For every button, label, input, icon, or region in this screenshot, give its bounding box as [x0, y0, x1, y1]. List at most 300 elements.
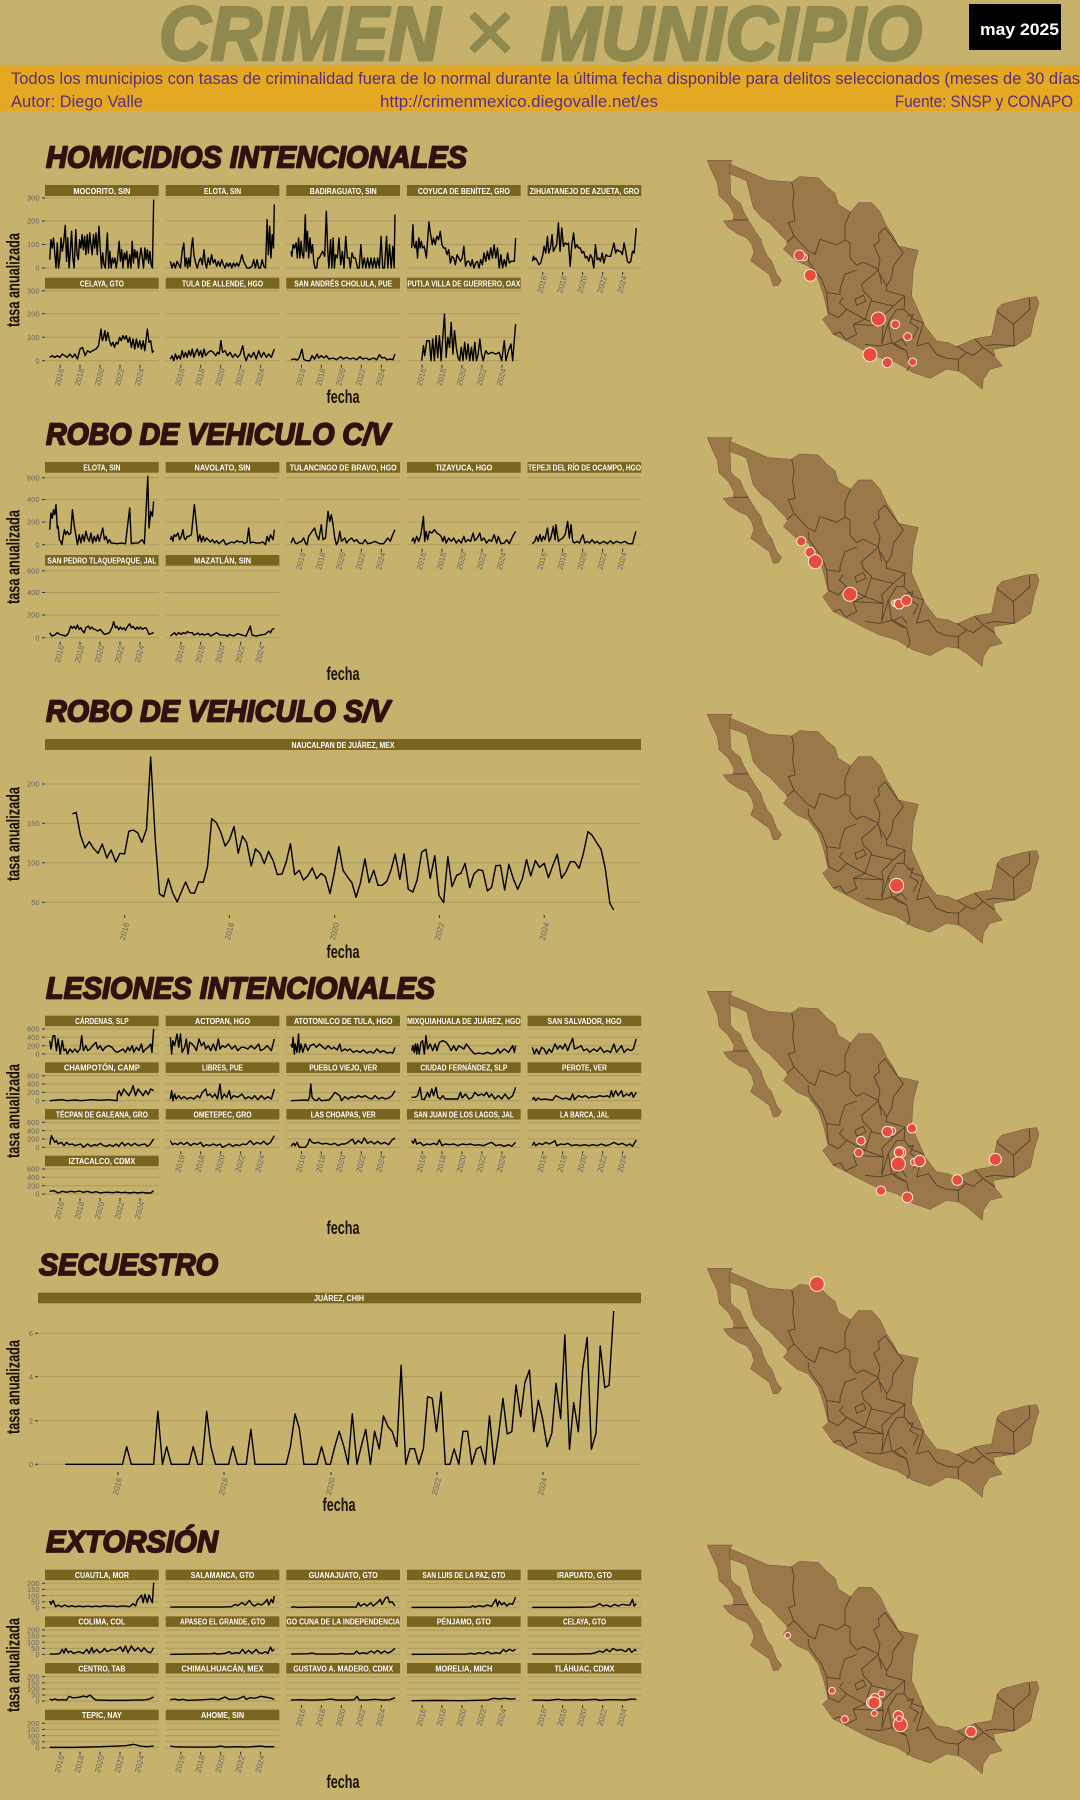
small multiple: Badiraguato: BADIRAGUATO, SIN — [310, 187, 377, 196]
small multiple: Técpan de Galeana: TÉCPAN DE GALEANA, GRO — [56, 1110, 148, 1119]
small multiple: Elota: ELOTA, SIN — [204, 187, 241, 196]
x axis labels: 2020 — [576, 274, 589, 294]
x axis labels: 2022 — [430, 1476, 443, 1496]
y axis labels: 0 — [35, 1096, 40, 1105]
x axis labels: 2024 — [254, 367, 267, 387]
x axis labels: 2024 — [133, 644, 146, 664]
x axis labels: 2022 — [596, 551, 609, 571]
small multiple: Pénjamo — [407, 1616, 521, 1654]
x axis title: fecha — [326, 387, 360, 407]
y axis title: tasa anualizada — [4, 786, 24, 881]
x axis labels: 2022 — [433, 921, 446, 941]
x axis labels: 2018 — [556, 1707, 569, 1727]
x axis labels: 2018 — [73, 1754, 86, 1774]
x axis labels: 2022 — [596, 1153, 609, 1173]
y axis labels: 100 — [27, 333, 40, 342]
small multiple: Colima — [45, 1616, 159, 1654]
x axis title: fecha — [326, 664, 360, 684]
y axis labels — [27, 473, 45, 642]
subtitle band: http://crimenmexico.diegovalle.net/es — [380, 93, 658, 111]
small multiple: Irapuato: IRAPUATO, GTO — [557, 1571, 612, 1580]
small multiple: Zihuatanejo de Azueta — [528, 185, 641, 268]
small multiple: Tláhuac — [528, 1663, 641, 1701]
y axis labels: 0 — [35, 264, 40, 273]
x axis labels: 2016 — [118, 921, 131, 941]
small multiple: Pueblo Viejo: PUEBLO VIEJO, VER — [309, 1064, 377, 1073]
y axis labels: 150 — [27, 819, 40, 828]
y axis labels: 50 — [31, 1737, 40, 1746]
y axis labels: 50 — [31, 1691, 40, 1700]
x axis labels: 2020 — [324, 1476, 337, 1496]
x axis labels: 2018 — [194, 367, 207, 387]
x axis labels: 2024 — [133, 1754, 146, 1774]
x axis labels: 2016 — [536, 551, 549, 571]
x axis labels: 2024 — [374, 551, 388, 571]
small multiple: Celaya — [528, 1616, 641, 1654]
x axis labels: 2020 — [334, 551, 348, 571]
x axis labels: 2018 — [217, 1476, 230, 1496]
y axis title: tasa anualizada — [4, 1617, 24, 1712]
x axis labels: 2020 — [93, 367, 106, 387]
y axis labels: 0 — [35, 540, 40, 549]
small multiple: Centro — [45, 1663, 159, 1701]
small multiple: Tizayuca: TIZAYUCA, HGO — [435, 464, 492, 473]
x axis labels — [53, 1151, 629, 1220]
small multiple: Chimalhuacán: CHIMALHUACÁN, MEX — [182, 1664, 264, 1673]
panel: robo de vehiculo s/v — [4, 694, 641, 962]
small multiple: Tepic: TEPIC, NAY — [82, 1711, 122, 1720]
x axis labels: 2016 — [415, 551, 428, 571]
small multiple: San Luis de la Paz: SAN LUIS DE LA PAZ, GTO — [422, 1571, 505, 1580]
y axis labels: 150 — [27, 1585, 40, 1594]
small multiple: La Barca — [528, 1109, 641, 1147]
x axis labels: 2018 — [194, 1153, 207, 1173]
x axis labels: 2022 — [354, 367, 368, 387]
small multiple: Putla Villa de Guerrero: PUTLA VILLA DE GUERRERO, OAX — [407, 280, 521, 288]
small multiple: Mocorito — [45, 185, 159, 268]
panel: robo de vehiculo c/v — [4, 416, 641, 684]
x axis labels: 2016 — [415, 367, 428, 387]
small multiple: Tepeji del Río de Ocampo: TEPEJI DEL RÍO DE OCAMPO, HGO — [528, 464, 641, 473]
x axis labels: 2018 — [73, 367, 86, 387]
small multiple: Guanajuato — [286, 1570, 400, 1608]
x axis labels: 2016 — [536, 1153, 549, 1173]
y axis labels: 600 — [27, 1165, 40, 1174]
x axis labels: 2016 — [536, 1707, 549, 1727]
y axis labels: 100 — [27, 858, 40, 867]
x axis labels: 2022 — [234, 1153, 247, 1173]
x axis labels: 2016 — [294, 551, 308, 571]
y axis labels: 200 — [27, 1135, 40, 1144]
x axis labels: 2020 — [214, 367, 227, 387]
small multiple: San Pedro Tlaquepaque — [45, 555, 159, 638]
x axis labels: 2020 — [93, 1754, 106, 1774]
small multiple: Navolato: NAVOLATO, SIN — [195, 464, 251, 473]
small multiple: Ahome — [166, 1710, 279, 1748]
subtitle band: Todos los municipios con tasas de criminalidad fuera de lo normal durante la última fecha disponible para delitos seleccionados (meses de 30 días — [11, 70, 1080, 88]
x axis labels: 2016 — [111, 1476, 124, 1496]
y axis labels: 150 — [27, 1678, 40, 1687]
map: lesiones — [707, 991, 1039, 1220]
small multiple: San Salvador — [528, 1016, 641, 1054]
x axis labels: 2024 — [495, 551, 508, 571]
small multiple: Irapuato — [528, 1570, 641, 1608]
y axis labels: 600 — [27, 566, 40, 575]
x axis title: fecha — [326, 942, 360, 962]
x axis labels: 2022 — [113, 644, 126, 664]
small multiple: Coyuca de Benítez: COYUCA DE BENÍTEZ, GRO — [418, 187, 510, 196]
x axis labels: 2024 — [495, 1153, 508, 1173]
x axis labels: 2016 — [53, 1200, 66, 1220]
x axis labels: 2022 — [113, 367, 126, 387]
panel: secuestro — [4, 1247, 641, 1515]
strip: Juárez: JUÁREZ, CHIH — [314, 1294, 364, 1303]
x axis labels: 2016 — [53, 1754, 66, 1774]
y axis labels — [27, 1025, 45, 1199]
y axis labels: 600 — [27, 1071, 40, 1080]
x axis labels: 2024 — [254, 1153, 267, 1173]
y axis labels: 0 — [35, 356, 40, 365]
x axis labels: 2020 — [214, 1754, 227, 1774]
x axis title: fecha — [326, 1218, 360, 1238]
y axis labels: 400 — [27, 588, 40, 597]
subtitle band: Autor: Diego Valle — [11, 93, 143, 111]
small multiple: Tepic — [45, 1710, 159, 1748]
y axis labels: 100 — [27, 1638, 40, 1647]
subtitle band — [0, 65, 1080, 111]
x axis labels: 2018 — [556, 551, 569, 571]
y axis labels: 0 — [35, 1143, 40, 1152]
x axis labels: 2022 — [596, 1707, 609, 1727]
map: secuestro — [707, 1268, 1039, 1497]
small multiple: Iztacalco: IZTACALCO, CDMX — [69, 1157, 136, 1166]
small multiple: Pénjamo: PÉNJAMO, GTO — [437, 1618, 491, 1627]
small multiple: Champotón: CHAMPOTÓN, CAMP — [64, 1064, 141, 1073]
small multiple: Elota — [166, 185, 279, 268]
date badge: may 2025 — [980, 20, 1059, 39]
x axis labels: 2016 — [174, 1153, 187, 1173]
small multiple: Mixquiahuala de Juárez — [407, 1016, 521, 1054]
small multiple: Colima: COLIMA, COL — [78, 1618, 125, 1627]
x axis labels: 2016 — [294, 1153, 308, 1173]
x axis labels — [53, 272, 629, 387]
small multiple: Gustavo A. Madero — [286, 1663, 400, 1701]
x axis labels — [53, 549, 629, 664]
small multiple: Cuautla — [45, 1570, 159, 1608]
y axis labels: 50 — [31, 1597, 40, 1606]
y axis labels: 200 — [27, 1719, 40, 1728]
x axis title: fecha — [322, 1495, 356, 1515]
x axis labels — [111, 1472, 549, 1496]
y axis labels: 200 — [27, 1181, 40, 1190]
small multiple: San Andrés Cholula — [286, 278, 400, 361]
y axis labels: 200 — [27, 1579, 40, 1588]
small multiple: Ahome: AHOME, SIN — [201, 1711, 244, 1720]
x axis labels: 2016 — [294, 1707, 308, 1727]
y axis labels: 300 — [27, 286, 40, 295]
x axis labels: 2024 — [616, 274, 629, 294]
small multiple: Ometepec — [166, 1109, 279, 1147]
y axis labels: 50 — [31, 1644, 40, 1653]
heading: EXTORSIÓN — [46, 1524, 219, 1559]
y axis labels: 0 — [35, 1190, 40, 1199]
x axis labels: 2016 — [53, 367, 66, 387]
x axis labels: 2020 — [93, 1200, 106, 1220]
x axis labels: 2022 — [475, 367, 488, 387]
small multiple: Mazatlán: MAZATLÁN, SIN — [194, 557, 251, 566]
x axis labels: 2024 — [374, 1153, 388, 1173]
x axis labels: 2024 — [538, 921, 551, 941]
small multiple: Salamanca: SALAMANCA, GTO — [191, 1571, 254, 1580]
small multiple: Tula de Allende: TULA DE ALLENDE, HGO — [182, 280, 263, 288]
y axis labels — [27, 780, 45, 907]
y axis labels: 0 — [35, 633, 40, 642]
y axis labels: 200 — [27, 1041, 40, 1050]
x axis labels: 2018 — [314, 551, 328, 571]
x axis labels: 2018 — [556, 274, 569, 294]
map: extorsion — [707, 1545, 1039, 1774]
x axis labels: 2022 — [113, 1754, 126, 1774]
y axis labels: 200 — [27, 1672, 40, 1681]
y axis title: tasa anualizada — [4, 232, 24, 327]
small multiple: Morelia — [407, 1663, 521, 1701]
x axis labels: 2018 — [556, 1153, 569, 1173]
small multiple: Tulancingo de Bravo: TULANCINGO DE BRAVO, HGO — [290, 464, 397, 473]
x axis labels: 2020 — [576, 1153, 589, 1173]
heading: HOMICIDIOS INTENCIONALES — [46, 140, 467, 174]
small multiple: Iztacalco — [45, 1156, 159, 1194]
x axis labels: 2024 — [254, 644, 267, 664]
heading: SECUESTRO — [39, 1247, 218, 1282]
small multiple: Navolato — [166, 462, 279, 545]
panel: extorsion — [4, 1524, 641, 1792]
small multiple: Ometepec: OMETEPEC, GRO — [194, 1110, 252, 1119]
small multiple: Champotón — [45, 1062, 159, 1101]
y axis labels — [27, 194, 45, 365]
y axis labels: 100 — [27, 240, 40, 249]
x axis labels — [118, 915, 551, 941]
y axis labels: 200 — [27, 611, 40, 620]
y axis title: tasa anualizada — [4, 509, 24, 604]
y axis labels: 0 — [35, 1050, 40, 1059]
small multiple: Pueblo Viejo — [286, 1062, 400, 1101]
small multiple: San Juan de los Lagos — [407, 1109, 521, 1147]
small multiple: San Luis de la Paz — [407, 1570, 521, 1608]
x axis labels: 2016 — [536, 274, 549, 294]
small multiple: Gustavo A. Madero: GUSTAVO A. MADERO, CDMX — [293, 1664, 394, 1673]
panel: lesiones intencionales — [4, 970, 641, 1238]
x axis labels: 2024 — [536, 1476, 549, 1496]
small multiple: Mocorito: MOCORITO, SIN — [73, 187, 131, 196]
y axis labels: 600 — [27, 473, 40, 482]
x axis labels: 2022 — [354, 1707, 368, 1727]
x axis labels: 2020 — [214, 644, 227, 664]
line chart: Naucalpan — [45, 757, 641, 910]
y axis labels: 150 — [27, 1725, 40, 1734]
y axis labels: 4 — [29, 1372, 33, 1381]
x axis labels: 2018 — [194, 1754, 207, 1774]
small multiple: Las Choapas: LAS CHOAPAS, VER — [311, 1110, 376, 1119]
x axis labels: 2016 — [174, 644, 187, 664]
x axis labels: 2024 — [616, 551, 629, 571]
small multiple: Libres: LIBRES, PUE — [202, 1064, 244, 1073]
small multiple: Ciudad Fernández — [407, 1062, 521, 1101]
small multiple: Actopan: ACTOPAN, HGO — [195, 1017, 250, 1026]
y axis labels: 100 — [27, 1685, 40, 1694]
small multiple: Apaseo el Grande: APASEO EL GRANDE, GTO — [180, 1618, 265, 1627]
small multiple: Las Choapas — [286, 1109, 400, 1147]
y axis labels — [27, 1579, 45, 1752]
map: robo c/v — [707, 438, 1039, 667]
y axis labels: 100 — [27, 1591, 40, 1600]
date badge — [969, 4, 1061, 50]
y axis title: tasa anualizada — [4, 1063, 24, 1158]
x axis labels: 2020 — [334, 1153, 348, 1173]
strip: Naucalpan de Juárez — [45, 739, 641, 750]
y axis labels: 400 — [27, 1126, 40, 1135]
x axis labels: 2024 — [133, 367, 146, 387]
x axis labels: 2022 — [354, 551, 368, 571]
small multiple: San Pedro Tlaquepaque: SAN PEDRO TLAQUEPAQUE, JAL — [47, 557, 156, 566]
x axis labels: 2022 — [475, 1153, 488, 1173]
x axis labels: 2022 — [475, 1707, 488, 1727]
small multiple: Dolores Hidalgo Cuna de la Independencia — [286, 1616, 400, 1654]
small multiple: Elota — [45, 462, 159, 545]
small multiple: Tula de Allende — [166, 278, 279, 361]
small multiple: Celaya — [45, 278, 159, 361]
small multiple: Elota: ELOTA, SIN — [83, 464, 121, 473]
small multiple: Badiraguato — [286, 185, 400, 268]
x axis labels: 2018 — [314, 1707, 328, 1727]
small multiple: Putla Villa de Guerrero — [407, 278, 521, 361]
small multiple: Cuautla: CUAUTLA, MOR — [75, 1571, 129, 1580]
x axis labels: 2020 — [214, 1153, 227, 1173]
small multiple: Atotonilco de Tula: ATOTONILCO DE TULA, HGO — [294, 1017, 392, 1026]
x axis labels: 2018 — [314, 1153, 328, 1173]
y axis labels: 600 — [27, 1118, 40, 1127]
x axis labels: 2020 — [328, 921, 341, 941]
x axis labels: 2018 — [435, 367, 448, 387]
map: robo s/v — [707, 714, 1039, 943]
x axis labels: 2022 — [475, 551, 488, 571]
line chart: Juárez — [38, 1311, 641, 1464]
y axis labels: 400 — [27, 1080, 40, 1089]
y axis labels: 200 — [27, 1088, 40, 1097]
small multiple: Actopan — [166, 1016, 279, 1054]
small multiple: Tulancingo de Bravo — [286, 462, 400, 545]
y axis labels: 300 — [27, 194, 40, 203]
y axis labels: 0 — [35, 1650, 40, 1659]
title — [159, 0, 922, 81]
y axis labels: 6 — [29, 1329, 33, 1338]
x axis labels: 2018 — [194, 644, 207, 664]
small multiple: Guanajuato: GUANAJUATO, GTO — [309, 1571, 378, 1580]
x axis labels: 2020 — [93, 644, 106, 664]
map: homicidios — [707, 160, 1039, 389]
small multiple: La Barca: LA BARCA, JAL — [560, 1110, 609, 1119]
x axis labels: 2018 — [435, 1707, 448, 1727]
x axis labels: 2020 — [576, 551, 589, 571]
x axis labels: 2024 — [495, 1707, 508, 1727]
x axis labels: 2024 — [616, 1153, 629, 1173]
heading: LESIONES INTENCIONALES — [46, 970, 435, 1006]
x axis labels: 2024 — [495, 367, 508, 387]
small multiple: Cárdenas: CÁRDENAS, SLP — [75, 1017, 129, 1026]
x axis labels: 2020 — [334, 367, 348, 387]
small multiple: Tizayuca — [407, 462, 521, 545]
small multiple: Ciudad Fernández: CIUDAD FERNÁNDEZ, SLP — [420, 1064, 508, 1073]
y axis labels: 400 — [27, 1173, 40, 1182]
y axis labels: 400 — [27, 1033, 40, 1042]
small multiple: Morelia: MORELIA, MICH — [435, 1664, 493, 1673]
panel: homicidios intencionales — [4, 140, 641, 407]
small multiple: Mazatlán — [166, 555, 279, 638]
y axis labels: 200 — [27, 1626, 40, 1635]
x axis labels: 2022 — [234, 644, 247, 664]
x axis labels: 2022 — [596, 274, 609, 294]
heading: ROBO DE VEHICULO C/V — [46, 416, 392, 452]
x axis labels: 2024 — [254, 1754, 267, 1774]
y axis labels: 150 — [27, 1632, 40, 1641]
x axis labels: 2020 — [455, 367, 468, 387]
small multiple: Zihuatanejo de Azueta: ZIHUATANEJO DE AZUETA, GRO — [530, 187, 639, 196]
y axis title: tasa anualizada — [4, 1339, 24, 1434]
y axis labels: 200 — [27, 780, 40, 789]
strip: Juárez — [38, 1293, 641, 1303]
small multiple: Centro: CENTRO, TAB — [78, 1664, 126, 1673]
x axis labels: 2024 — [616, 1707, 629, 1727]
y axis labels: 400 — [27, 495, 40, 504]
small multiple: San Andrés Cholula: SAN ANDRÉS CHOLULA, PUE — [294, 280, 393, 288]
x axis title: fecha — [326, 1772, 360, 1792]
x axis labels: 2018 — [435, 1153, 448, 1173]
small multiple: Mixquiahuala de Juárez: MIXQUIAHUALA DE JUÁREZ, HGO — [407, 1017, 521, 1026]
x axis labels: 2018 — [435, 551, 448, 571]
x axis labels: 2016 — [415, 1707, 428, 1727]
small multiple: Atotonilco de Tula — [286, 1016, 400, 1054]
y axis labels: 200 — [27, 309, 40, 318]
x axis labels: 2024 — [374, 1707, 388, 1727]
small multiple: Tláhuac: TLÁHUAC, CDMX — [555, 1664, 615, 1673]
x axis labels: 2024 — [374, 367, 388, 387]
y axis labels: 200 — [27, 518, 40, 527]
small multiple: Salamanca — [166, 1570, 279, 1608]
y axis labels: 100 — [27, 1731, 40, 1740]
small multiple: Tepeji del Río de Ocampo — [528, 462, 641, 545]
y axis labels — [29, 1329, 38, 1469]
small multiple: Cárdenas — [45, 1016, 159, 1054]
x axis labels: 2022 — [234, 367, 247, 387]
strip: Naucalpan de Juárez: NAUCALPAN DE JUÁREZ, MEX — [292, 741, 395, 750]
x axis labels: 2022 — [234, 1754, 247, 1774]
x axis labels: 2022 — [354, 1153, 368, 1173]
small multiple: Apaseo el Grande — [166, 1616, 279, 1654]
small multiple: Perote: PEROTE, VER — [562, 1064, 607, 1073]
y axis labels: 600 — [27, 1025, 40, 1034]
x axis labels: 2024 — [133, 1200, 146, 1220]
small multiple: Libres — [166, 1062, 279, 1101]
small multiple: Coyuca de Benítez — [407, 185, 521, 268]
x axis labels: 2020 — [455, 1153, 468, 1173]
y axis labels: 0 — [35, 1603, 40, 1612]
x axis labels: 2020 — [455, 551, 468, 571]
y axis labels: 0 — [35, 1743, 40, 1752]
y axis labels: 0 — [35, 1697, 40, 1706]
x axis labels: 2020 — [334, 1707, 348, 1727]
x axis labels: 2018 — [73, 1200, 86, 1220]
small multiple: San Juan de los Lagos: SAN JUAN DE LOS LAGOS, JAL — [414, 1110, 514, 1119]
y axis labels: 2 — [29, 1416, 33, 1425]
